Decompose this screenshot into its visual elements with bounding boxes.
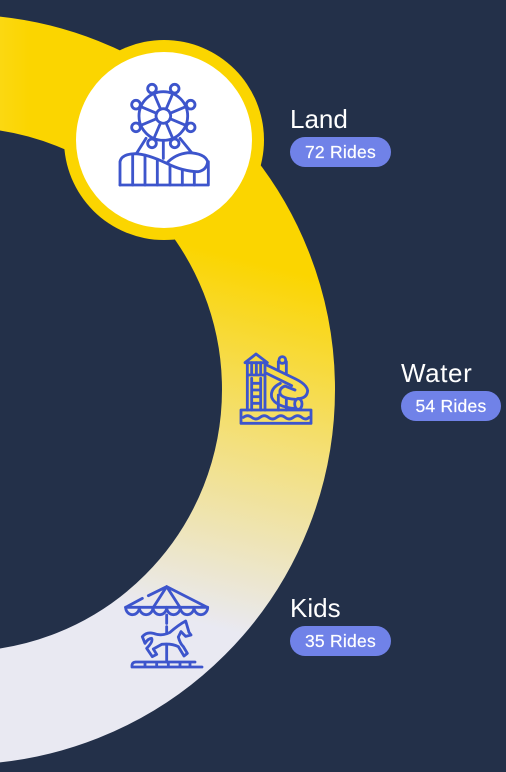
pill: 72 Rides: 72 Rides [305,142,376,162]
icon: carousel [126,587,208,667]
heading: Land: Land [290,104,348,134]
panel: land [64,40,264,240]
label: land [290,104,391,167]
heading: Water: Water [401,358,472,388]
pill: 35 Rides: 35 Rides [305,631,376,651]
icon badge: land [64,40,264,240]
label: kids [290,593,391,656]
pill: 54 Rides: 54 Rides [415,396,487,416]
label: water [401,358,501,421]
heading: Kids: Kids [290,593,341,623]
icon: ferris wheel and roller coaster [120,84,208,185]
icon: water slide [241,354,311,423]
ring arc [0,10,278,708]
